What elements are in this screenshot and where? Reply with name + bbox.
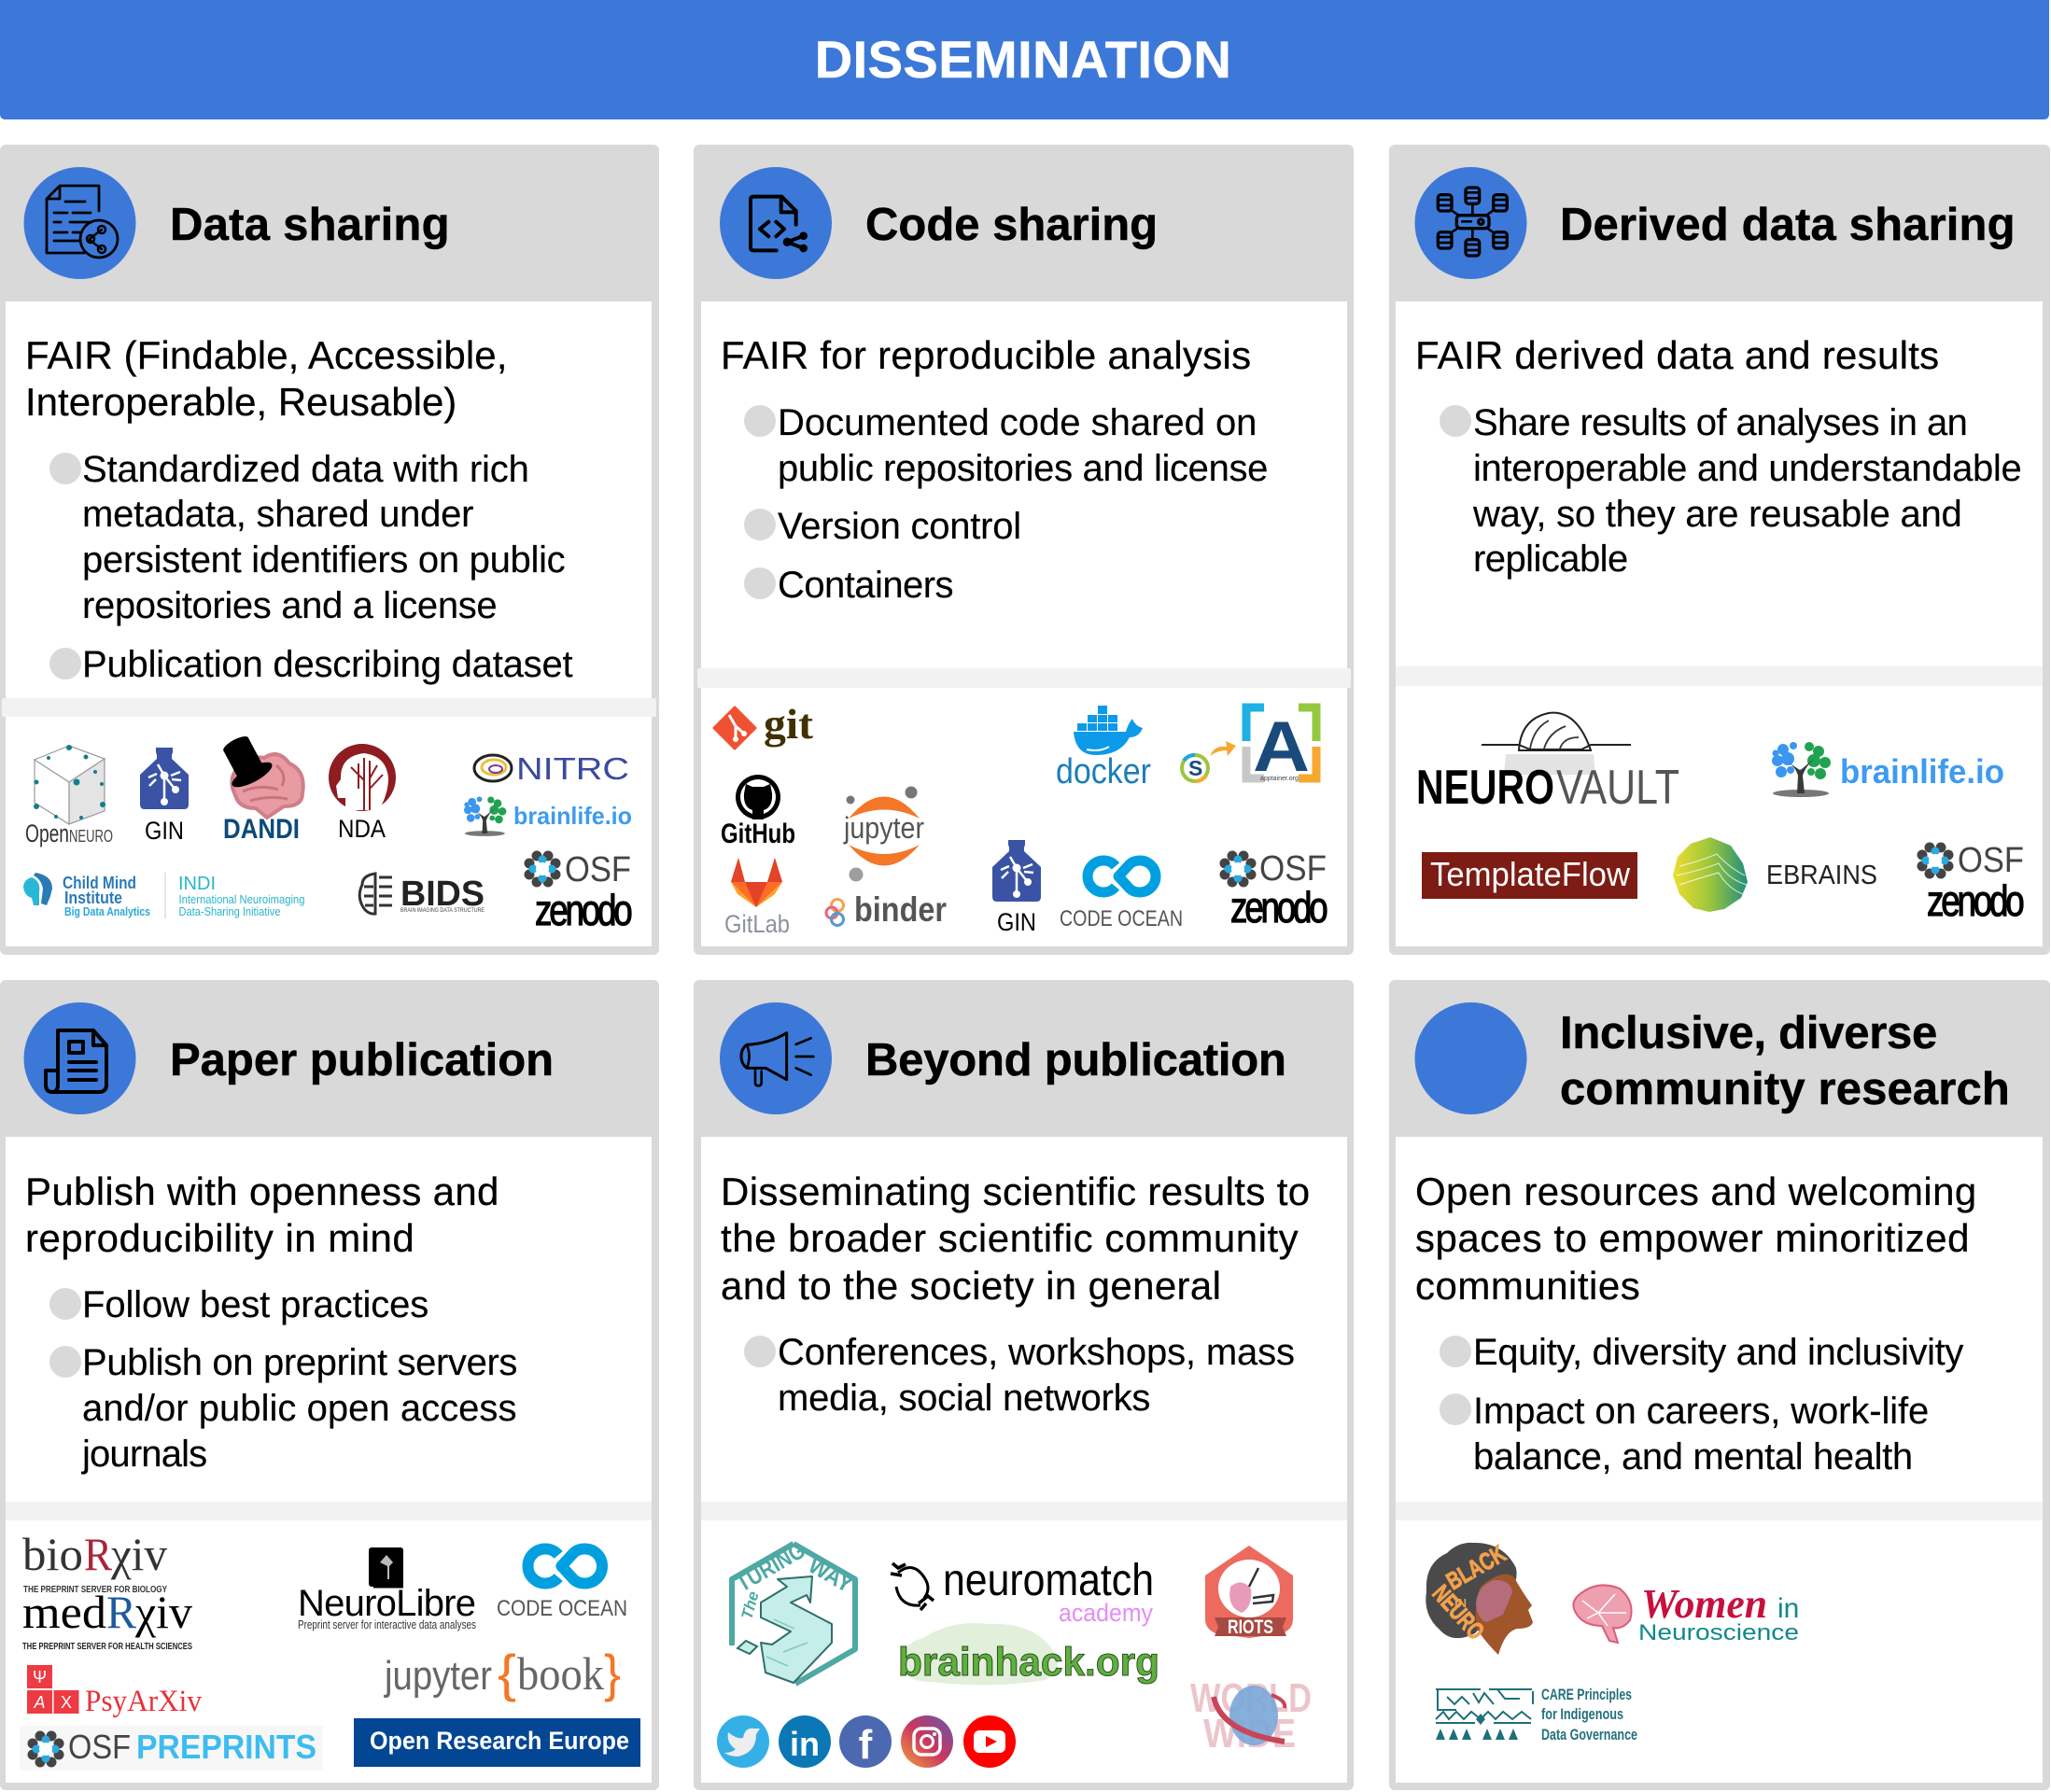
- subtitle: communities: [1415, 1264, 1640, 1308]
- icon: paper document: [24, 1002, 136, 1114]
- logo: docker: docker: [1056, 752, 1151, 791]
- logo: GIN: [992, 840, 1041, 936]
- logo: OSF: OSF: [1259, 849, 1327, 889]
- logo: CARE Principles: [1436, 1686, 1637, 1743]
- logo divider band: [1396, 666, 2043, 686]
- bullet list: [744, 402, 1268, 606]
- logo: PsyArXiv: X: [61, 1693, 72, 1712]
- bullet list: persistent identifiers on public: [82, 539, 565, 581]
- icon: Twitter: [717, 1715, 769, 1768]
- logo divider band: [1396, 1502, 2043, 1520]
- logo: zenodo: zenodo: [1230, 883, 1328, 931]
- icon: network of databases: [1415, 167, 1527, 279]
- logo: binder: [826, 890, 947, 929]
- bullet list: repositories and a license: [82, 585, 497, 626]
- logo: OSF: [1219, 849, 1327, 889]
- logo: GitHub: [721, 775, 795, 849]
- logo: GitLab: GitLab: [724, 910, 790, 938]
- logo: NeuroLibre: NeuroLibre: [298, 1583, 476, 1624]
- logo: World Wide Neuro: WORLD: [1190, 1675, 1312, 1721]
- logo: medRxiv: R: [106, 1586, 137, 1638]
- panel: beyond publication: [694, 980, 1354, 1790]
- panel background: [0, 980, 659, 1790]
- logo: World Wide Neuro: WIDE: [1203, 1711, 1296, 1757]
- logo: bioRxiv: R: [84, 1528, 113, 1580]
- logo: World Wide Neuro: [1190, 1675, 1312, 1757]
- logo: brainlife.io: [1772, 742, 2004, 797]
- subtitle: the broader scientific community: [721, 1216, 1299, 1260]
- logo: BIDS: BIDS: [400, 875, 485, 914]
- logo divider band: [6, 1502, 652, 1520]
- logo: BIDS: BRAIN IMAGING DATA STRUCTURE: [400, 908, 485, 914]
- logos: preprint servers and journals: [20, 1528, 640, 1771]
- logo: bioRxiv: [22, 1528, 167, 1595]
- logo: Child Mind Institute / INDI: Child Mind: [63, 874, 136, 892]
- logo: neuromatch academy: neuromatch: [943, 1556, 1154, 1605]
- logo: Black in Neuro: IN: [1454, 1596, 1467, 1610]
- logo: Women in Neuroscience: Women: [1641, 1581, 1767, 1627]
- logo: OpenNeuro: Open: [25, 819, 69, 847]
- heading: Paper publication: [170, 1035, 554, 1085]
- subtitle: Open resources and welcoming: [1415, 1169, 1977, 1213]
- bullet list: Standardized data with rich: [82, 449, 529, 490]
- logo: TemplateFlow: TemplateFlow: [1430, 855, 1631, 893]
- logo: NeuroLibre: Preprint server for interactive data analyses: [298, 1617, 476, 1631]
- logo: OSF: [1918, 841, 2024, 880]
- logo: DANDI: DANDI: [223, 814, 300, 845]
- subtitle: [25, 1169, 499, 1260]
- logo: jupyter: [843, 786, 924, 881]
- logo: neuromatch academy: [891, 1556, 1154, 1627]
- logo: CARE Principles: CARE Principles: [1541, 1686, 1632, 1703]
- icon: Facebook: [839, 1715, 892, 1768]
- panel background: [1389, 145, 2050, 955]
- logo: bioRxiv: χiv: [110, 1528, 167, 1580]
- panel white body: [6, 1137, 652, 1783]
- logo: medRxiv: χiv: [134, 1586, 192, 1638]
- logo: brainlife.io: brainlife.io: [1840, 752, 2004, 791]
- bullet list: public repositories and license: [778, 448, 1268, 489]
- bullet list: Equity, diversity and inclusivity: [1473, 1332, 1963, 1373]
- panel: derived data sharing: [1389, 145, 2050, 955]
- bullet list: Impact on careers, work-life: [1473, 1391, 1929, 1432]
- logo: Child Mind Institute / INDI: Data-Sharing Initiative: [179, 904, 280, 918]
- logo: NeuroVault: NEURO: [1416, 761, 1554, 815]
- logo: GitLab: [724, 858, 790, 938]
- logo: BIDS: [359, 874, 485, 914]
- logo: Child Mind Institute / INDI: INDI: [178, 874, 216, 894]
- title banner: DISSEMINATION: [815, 30, 1231, 89]
- logo: brainlife.io: [464, 796, 632, 836]
- logo: Code Ocean: [497, 1548, 627, 1621]
- subtitle: FAIR derived data and results: [1415, 333, 1939, 377]
- subtitle: FAIR (Findable, Accessible,: [25, 333, 508, 377]
- bullet list: journals: [81, 1434, 206, 1475]
- logo: Black in Neuro: NEURO: [1427, 1579, 1490, 1645]
- logo: Women in Neuroscience: Neuroscience: [1638, 1620, 1799, 1645]
- bullet list: Version control: [778, 506, 1021, 547]
- logo: Open Research Europe: [354, 1718, 640, 1767]
- bullet list: Documented code shared on: [778, 402, 1257, 443]
- logo: GitHub: GitHub: [721, 819, 795, 849]
- icon: code file with share symbol: [720, 167, 832, 279]
- panel white body: [701, 301, 1347, 946]
- logo: Apptainer: A: [1253, 707, 1310, 787]
- logo: EBRAINS: [1673, 837, 1877, 912]
- icon: LinkedIn: in: [790, 1725, 820, 1763]
- panel: inclusive, diverse community research: [1389, 980, 2050, 1790]
- logo: CARE Principles: for Indigenous: [1541, 1705, 1623, 1723]
- logo: bioRxiv: THE PREPRINT SERVER FOR BIOLOGY: [23, 1585, 167, 1595]
- bullet list: Conferences, workshops, mass: [778, 1332, 1295, 1373]
- logo: OSF: OSF: [565, 850, 631, 889]
- logo: NDA: NDA: [338, 815, 386, 843]
- logo: NDA: [329, 744, 396, 843]
- panel background: [1389, 980, 2050, 1790]
- bullet list: Publication describing dataset: [82, 644, 573, 685]
- subtitle: [1415, 1169, 1977, 1308]
- logo: PsyArXiv: A: [33, 1693, 46, 1712]
- logo: jupyter: jupyter: [843, 811, 924, 845]
- logo divider band: [2, 698, 656, 717]
- logo: NITRC: [474, 751, 629, 786]
- panel background: [0, 145, 659, 955]
- subtitle: Disseminating scientific results to: [721, 1169, 1311, 1213]
- logo: brainlife.io: brainlife.io: [513, 802, 632, 830]
- panel background: [694, 980, 1354, 1790]
- logo: NITRC: NITRC: [516, 751, 629, 786]
- logo: Code Ocean: [1060, 861, 1183, 931]
- panel white body: [701, 1137, 1347, 1783]
- logo: RIOTS: [1205, 1546, 1293, 1638]
- logo: CARE Principles: Data Governance: [1541, 1726, 1637, 1743]
- logo: PsyArXiv: Ψ: [33, 1668, 47, 1687]
- logo: OSF: [525, 850, 631, 889]
- logo: Code Ocean: CODE OCEAN: [1060, 906, 1183, 931]
- logo: The Turing Way: TURING: [732, 1537, 809, 1597]
- subtitle: reproducibility in mind: [25, 1216, 414, 1260]
- logos: data repositories: [23, 730, 632, 934]
- icon: megaphone: [720, 1002, 832, 1114]
- social media icons: [717, 1715, 1016, 1768]
- logos: derived data resources: [1416, 713, 2024, 925]
- logo: The Turing Way: [732, 1537, 858, 1684]
- panel white body: [1396, 1137, 2043, 1783]
- subtitle: FAIR for reproducible analysis: [721, 333, 1251, 377]
- icon: Facebook: f: [859, 1722, 873, 1768]
- logo divider band: [701, 1502, 1347, 1520]
- heading: Derived data sharing: [1560, 200, 2016, 250]
- logo: git: [714, 700, 814, 749]
- logo divider band: [697, 668, 1351, 688]
- logo: Child Mind Institute / INDI: Institute: [64, 889, 122, 907]
- bullet list: way, so they are reusable and: [1472, 494, 1961, 535]
- bullet list: [49, 449, 573, 685]
- bullet list: balance, and mental health: [1473, 1436, 1913, 1477]
- logo: NeuroVault: [1416, 713, 1679, 815]
- bullet list: [49, 1284, 517, 1475]
- bullet list: [1440, 402, 2021, 580]
- heading: Data sharing: [170, 200, 450, 250]
- logo: DANDI: [214, 730, 303, 845]
- logo: singularity arrow: [1182, 741, 1236, 781]
- logo: GIN: GIN: [997, 908, 1036, 936]
- bullet list: [1440, 1332, 1963, 1477]
- logo: PsyArXiv: PsyArXiv: [85, 1685, 202, 1718]
- logo: Jupyter Book: jupyter: [383, 1653, 492, 1699]
- logo: Apptainer: apptainer.org: [1260, 776, 1299, 782]
- logo: The Turing Way: WAY: [804, 1552, 858, 1598]
- logo: OSF: OSF: [1958, 841, 2024, 880]
- logo: PsyArXiv: [27, 1665, 202, 1718]
- logo: binder: binder: [854, 890, 947, 929]
- subtitle: and to the society in general: [721, 1264, 1221, 1308]
- panel: paper publication: [0, 980, 659, 1790]
- icon: YouTube: [963, 1715, 1016, 1768]
- bullet list: and/or public open access: [82, 1388, 517, 1429]
- logo: zenodo: zenodo: [535, 886, 632, 934]
- logo: singularity arrow: S: [1188, 756, 1202, 780]
- heading: Code sharing: [865, 200, 1158, 250]
- panel white body: [1396, 301, 2043, 946]
- heading: Inclusive, diverse: [1560, 1008, 1937, 1058]
- logo: OSF Preprints: PREPRINTS: [136, 1728, 316, 1766]
- logo: git: git: [764, 700, 814, 748]
- logo: Open Research Europe: Open Research Europe: [370, 1727, 629, 1755]
- subtitle: Interoperable, Reusable): [25, 380, 457, 424]
- panel white body: [6, 301, 652, 946]
- icon: empty blue circle: [1415, 1002, 1527, 1114]
- logo: Jupyter Book: {: [498, 1644, 516, 1702]
- logo: Women in Neuroscience: [1573, 1581, 1799, 1645]
- logo: OSF Preprints: OSF: [68, 1728, 131, 1766]
- logo: Jupyter Book: book: [517, 1647, 604, 1700]
- logo: Women in Neuroscience: in: [1777, 1593, 1799, 1624]
- heading: [1560, 1008, 2010, 1114]
- logo: The Turing Way: The: [738, 1589, 763, 1621]
- logo: OpenNeuro: NEURO: [69, 827, 113, 846]
- subtitle: [721, 1169, 1311, 1308]
- subtitle: [25, 333, 508, 424]
- bullet list: Share results of analyses in an: [1473, 402, 1967, 443]
- logo: OpenNeuro: [25, 745, 113, 847]
- logo: NeuroLibre: [298, 1547, 476, 1631]
- logo: Jupyter Book: }: [604, 1644, 621, 1702]
- heading: community research: [1560, 1064, 2010, 1114]
- logo: brainhack.org: brainhack.org: [898, 1640, 1159, 1685]
- logo: bioRxiv: bio: [22, 1528, 83, 1580]
- logo: medRxiv: [22, 1586, 192, 1652]
- logo: Child Mind Institute / INDI: [23, 873, 304, 918]
- title banner: [0, 0, 2049, 119]
- logo: GIN: [140, 748, 189, 845]
- icon: Instagram: [901, 1715, 953, 1768]
- logo: RIOTS: RIOTS: [1228, 1617, 1273, 1638]
- logo: Black in Neuro: [1426, 1539, 1533, 1655]
- bullet list: metadata, shared under: [82, 494, 473, 535]
- subtitle: spaces to empower minoritized: [1415, 1216, 1970, 1260]
- subtitle: Publish with openness and: [25, 1169, 499, 1213]
- bullet list: Follow best practices: [82, 1284, 428, 1325]
- logo: Code Ocean: CODE OCEAN: [497, 1596, 627, 1621]
- bullet list: Containers: [778, 565, 953, 606]
- logos: code tools: [714, 700, 1328, 938]
- logo: Child Mind Institute / INDI: International Neuroimaging: [179, 892, 304, 906]
- logo: EBRAINS: EBRAINS: [1766, 861, 1877, 890]
- panel: code sharing: [694, 145, 1354, 955]
- bullet list: replicable: [1473, 539, 1628, 580]
- bullet list: Publish on preprint servers: [82, 1342, 517, 1383]
- bullet list: [744, 1332, 1295, 1419]
- icon: document with share symbol: [24, 167, 136, 279]
- logo: medRxiv: THE PREPRINT SERVER FOR HEALTH SCIENCES: [22, 1642, 192, 1652]
- icon: LinkedIn: [779, 1715, 831, 1768]
- logo: Black in Neuro: BLACK: [1441, 1539, 1510, 1595]
- heading: Beyond publication: [865, 1035, 1286, 1085]
- logo: GIN: GIN: [145, 817, 184, 845]
- bullet list: media, social networks: [778, 1378, 1150, 1419]
- logo: OSF Preprints: [20, 1726, 323, 1771]
- logo: NeuroVault: VAULT: [1556, 761, 1679, 815]
- panel: data sharing: [0, 145, 659, 955]
- logo: docker: [1056, 706, 1151, 791]
- logo: medRxiv: med: [22, 1586, 106, 1638]
- panel background: [694, 145, 1354, 955]
- logo: Child Mind Institute / INDI: Big Data Analytics: [64, 904, 150, 918]
- logo: zenodo: zenodo: [1927, 876, 2024, 925]
- logo: Jupyter Book: [383, 1644, 621, 1702]
- logo: neuromatch academy: academy: [1059, 1599, 1153, 1627]
- bullet list: interoperable and understandable: [1473, 448, 2021, 489]
